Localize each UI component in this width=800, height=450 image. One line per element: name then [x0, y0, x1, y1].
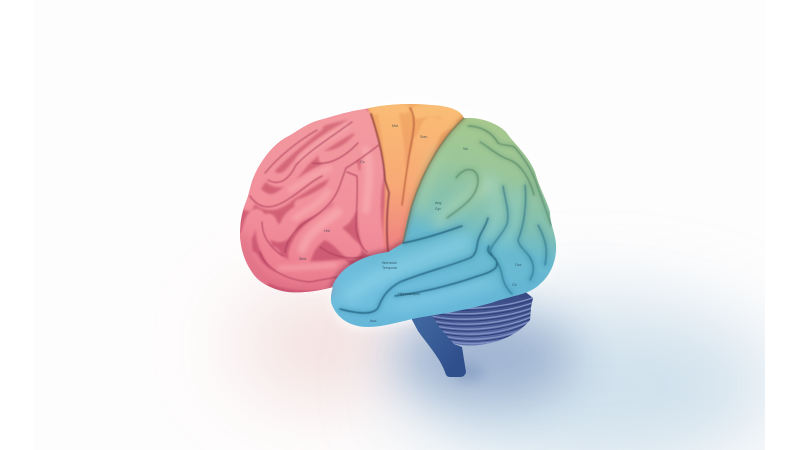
tiny region labels: Vis	[463, 147, 468, 151]
cast shadow: pink glow	[235, 295, 425, 395]
tiny region labels: Aud	[370, 319, 376, 323]
tiny region labels: Sme	[299, 257, 306, 261]
soft volume shading	[242, 150, 545, 325]
tiny region labels: Cb	[512, 283, 517, 287]
illustration: 3D colour-coded brain on a soft background	[218, 104, 765, 450]
tiny region labels: Wernicke	[382, 261, 397, 265]
tiny region labels: Hippocampus	[398, 292, 420, 296]
cerebellum	[432, 292, 533, 346]
contact shadow under stem	[452, 363, 484, 381]
pink ridge highlights	[280, 126, 369, 268]
orange central groove	[402, 108, 414, 205]
tiny region labels: Som	[420, 135, 427, 139]
tiny region labels: Ang	[435, 201, 441, 205]
sharp groove lines	[340, 114, 551, 313]
tiny region labels: Gyr	[435, 207, 442, 211]
cast shadow: core blue	[395, 313, 575, 403]
soft groove shadows: orange boundary and blue folds	[340, 118, 551, 313]
pink groove lines	[250, 122, 384, 282]
white halo around brain	[240, 103, 553, 328]
green and blue occipital and temporal lobes	[330, 118, 556, 327]
cerebrum	[240, 104, 556, 327]
tiny region labels: Cs	[360, 160, 365, 164]
shadow of temporal lobe on upper lobes	[331, 243, 403, 290]
pink frontal lobe	[240, 108, 386, 300]
tiny region labels: Mot	[392, 124, 398, 128]
brain stem	[410, 310, 466, 377]
orange parietal lobe	[368, 104, 464, 252]
cast shadow: wide blue glow	[400, 300, 780, 450]
tiny region labels: Hnt	[324, 229, 330, 233]
tiny region labels: Occ	[515, 263, 522, 267]
tiny region labels	[299, 124, 522, 323]
tiny region labels: Temporal	[382, 266, 397, 270]
